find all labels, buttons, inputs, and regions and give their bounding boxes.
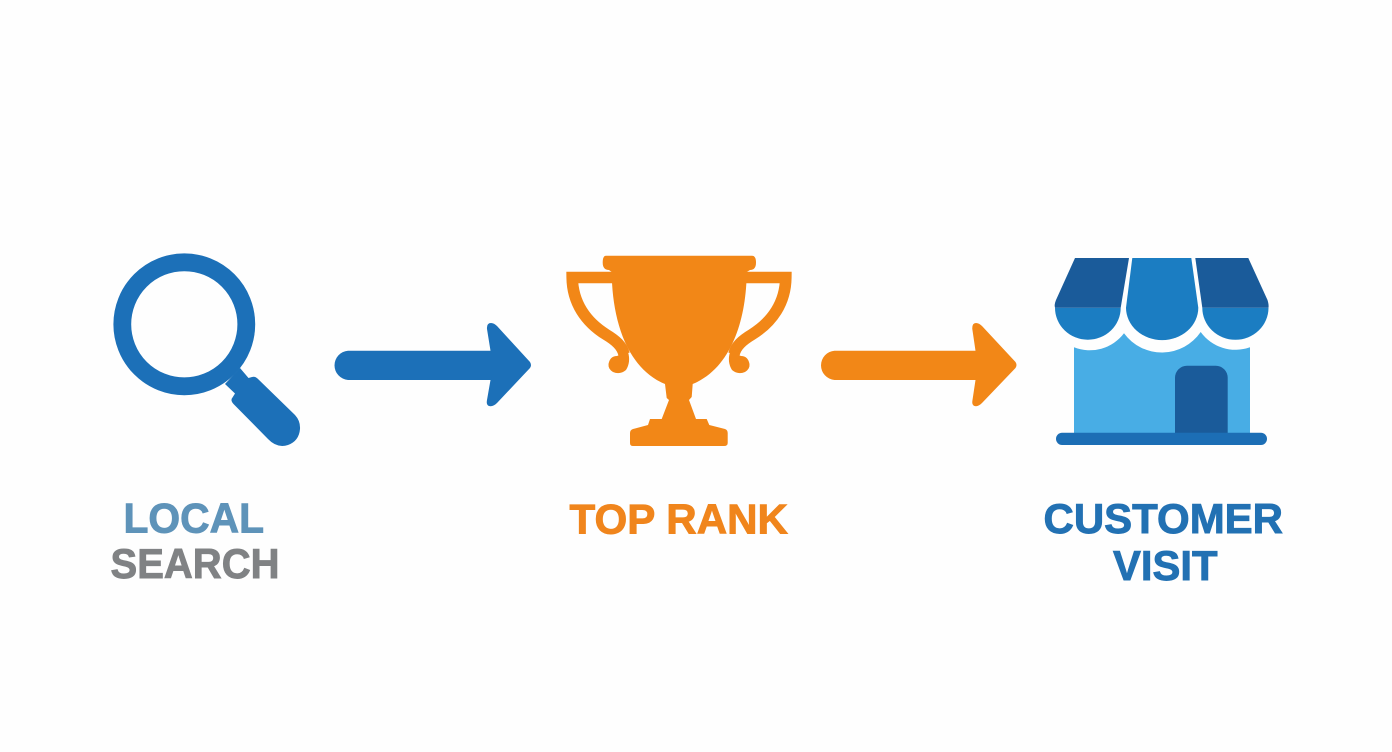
- awning right stripe: [1202, 308, 1268, 340]
- left handle: [572, 278, 629, 373]
- icon: magnifying glass: [122, 262, 300, 446]
- door: [1175, 366, 1228, 433]
- shop wall: [1074, 332, 1250, 433]
- label: customer visit: [1044, 495, 1283, 589]
- label: customer visit: CUSTOMER: [1044, 495, 1283, 542]
- label: top rank: TOP RANK: [570, 495, 788, 542]
- arrow: rank to visit: [821, 323, 1016, 406]
- trophy cup and base: [603, 256, 756, 446]
- icon: storefront: [1055, 258, 1269, 445]
- arrow: search to rank: [335, 323, 531, 406]
- right handle: [729, 278, 786, 373]
- icon: trophy: [572, 256, 786, 446]
- label: local search: LOCAL: [124, 495, 264, 542]
- awning left stripe: [1055, 308, 1121, 340]
- label: customer visit: VISIT: [1113, 542, 1218, 589]
- label: local search: SEARCH: [110, 540, 280, 587]
- label: local search: [110, 495, 280, 587]
- awning middle stripe: [1126, 258, 1198, 340]
- ground bar: [1056, 433, 1267, 445]
